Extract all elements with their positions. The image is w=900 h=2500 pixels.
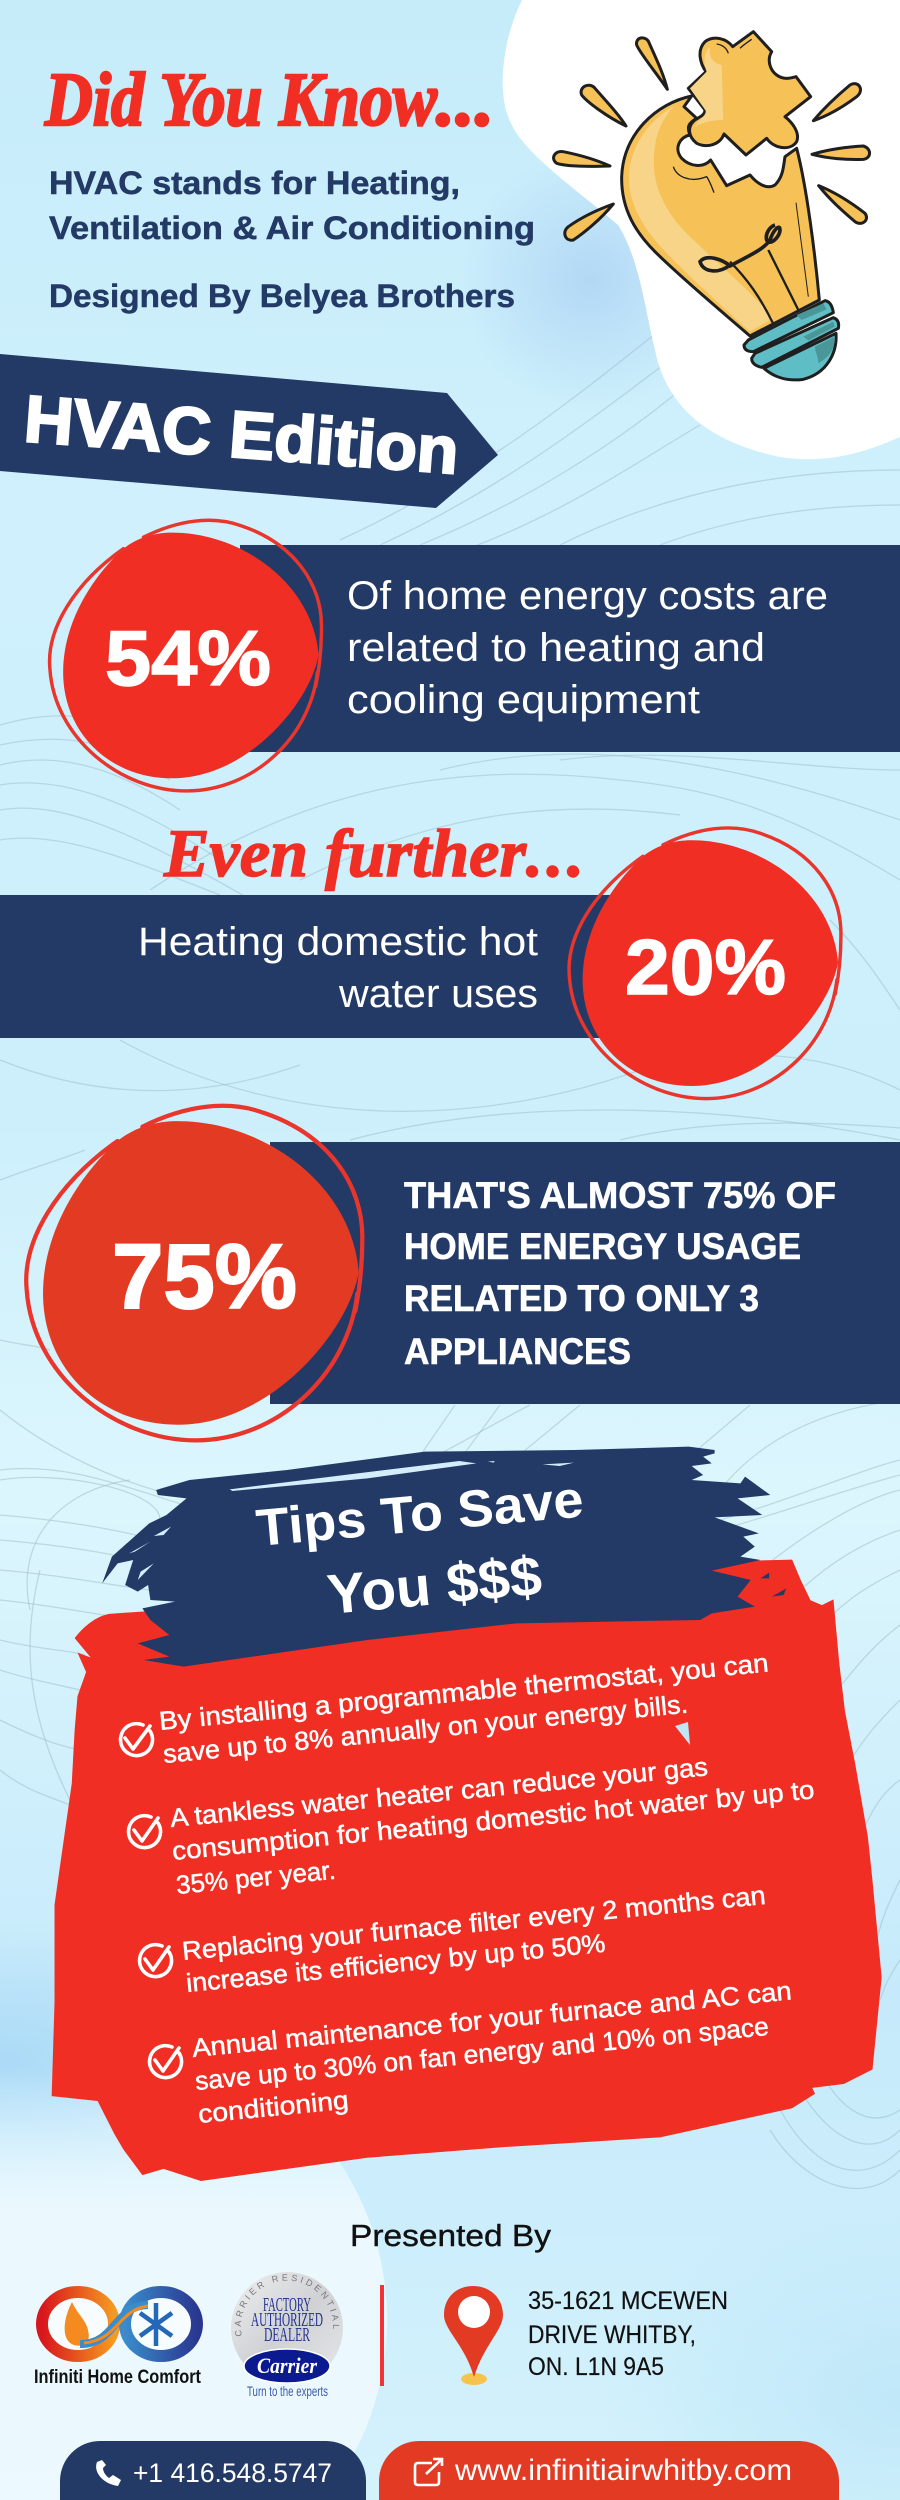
panel: 75% stat: THAT'S ALMOST 75% OF xyxy=(404,1175,836,1216)
icon: cracked light bulb xyxy=(554,32,870,380)
tip 1 xyxy=(121,1647,770,1769)
tip 2: A tankless water heater can reduce your gas xyxy=(169,1751,709,1833)
button: phone: +1 416.548.5747 xyxy=(133,2458,332,2488)
white blob behind bulb xyxy=(503,0,900,459)
panel: 54% stat: Of home energy costs are xyxy=(347,574,828,618)
heading: Presented By: Presented By xyxy=(350,2218,552,2253)
panel: 75% stat: 75% xyxy=(112,1226,297,1328)
panel: 54% stat xyxy=(50,520,900,791)
panel: 20% stat: water uses xyxy=(338,972,538,1016)
heading: Even further: Even further xyxy=(163,815,527,891)
divider line xyxy=(380,2285,384,2386)
panel: 20% stat: 20% xyxy=(625,923,786,1011)
tip 3: increase its efficiency by up to 50% xyxy=(185,1928,607,1998)
brush: tips heading: You $$$ xyxy=(324,1544,544,1626)
tip 2: 35% per year. xyxy=(175,1855,337,1900)
logo: Carrier factory authorized dealer: DEALER xyxy=(264,2324,310,2346)
tip 1: By installing a programmable thermostat, you can xyxy=(158,1647,770,1736)
panel: 75% stat: APPLIANCES xyxy=(404,1331,631,1372)
panel: red tips brush background xyxy=(52,1560,882,2181)
panel: 54% stat: cooling equipment xyxy=(347,678,700,722)
text: designed by: Designed By Belyea Brothers xyxy=(49,278,515,314)
heading: Even further: ... xyxy=(526,815,584,891)
button: phone xyxy=(60,2441,366,2500)
ribbon: HVAC Edition: HVAC Edition xyxy=(22,381,461,488)
panel: 20% stat xyxy=(0,828,841,1099)
panel: 75% stat: HOME ENERGY USAGE xyxy=(404,1226,801,1267)
address: DRIVE WHITBY, xyxy=(528,2321,696,2349)
title: Did You Know: ... xyxy=(436,58,494,142)
logo: Carrier factory authorized dealer: FACTORY xyxy=(263,2294,311,2316)
logo: Carrier factory authorized dealer: AUTHORIZED xyxy=(251,2309,323,2331)
logo: Carrier factory authorized dealer: Turn to the experts xyxy=(247,2383,328,2399)
ribbon: HVAC Edition xyxy=(0,354,498,508)
text: HVAC definition xyxy=(49,165,535,246)
tip 4: conditioning xyxy=(197,2085,350,2129)
address: ON. L1N 9A5 xyxy=(528,2353,664,2381)
tip 4: save up to 30% on fan energy and 10% on space xyxy=(194,2011,770,2096)
address xyxy=(528,2287,728,2381)
button: website: www.infinitiairwhitby.com xyxy=(454,2454,792,2487)
icon: location pin xyxy=(444,2286,503,2385)
tip 1: save up to 8% annually on your energy bills. xyxy=(162,1689,689,1769)
title: Did You Know: Did You Know xyxy=(44,58,437,142)
tip 3 xyxy=(140,1880,767,1998)
tip 4 xyxy=(150,1975,793,2129)
panel: 54% stat: related to heating and xyxy=(347,626,765,670)
logo: Carrier factory authorized dealer: Carrier xyxy=(257,2353,317,2378)
tip 3: Replacing your furnace filter every 2 months can xyxy=(181,1880,767,1966)
panel: 20% stat: Heating domestic hot xyxy=(138,920,538,964)
text: HVAC definition: HVAC stands for Heating, xyxy=(49,165,460,201)
brush: tips heading: Tips To Save xyxy=(254,1470,586,1558)
panel: 75% stat xyxy=(26,1106,900,1440)
tip 4: Annual maintenance for your furnace and AC can xyxy=(191,1975,793,2063)
panel: 75% stat: RELATED TO ONLY 3 xyxy=(404,1278,759,1319)
button: website xyxy=(379,2441,839,2500)
panel: 54% stat: 54% xyxy=(105,614,271,702)
logo: Infiniti Home Comfort: Infiniti Home Comfort xyxy=(34,2367,202,2388)
tip 2 xyxy=(129,1751,816,1900)
address: 35-1621 MCEWEN xyxy=(528,2287,728,2315)
tip 2: consumption for heating domestic hot water by up to xyxy=(171,1774,816,1866)
brush: tips heading xyxy=(102,1447,786,1667)
logo: Carrier factory authorized dealer xyxy=(231,2272,343,2399)
logo: Carrier factory authorized dealer: CARRIER RESIDENTIAL xyxy=(234,2274,340,2336)
small hole in red panel xyxy=(675,1722,690,1745)
text: HVAC definition: Ventilation & Air Conditioning xyxy=(49,210,535,246)
logo: Infiniti Home Comfort xyxy=(34,2292,202,2388)
